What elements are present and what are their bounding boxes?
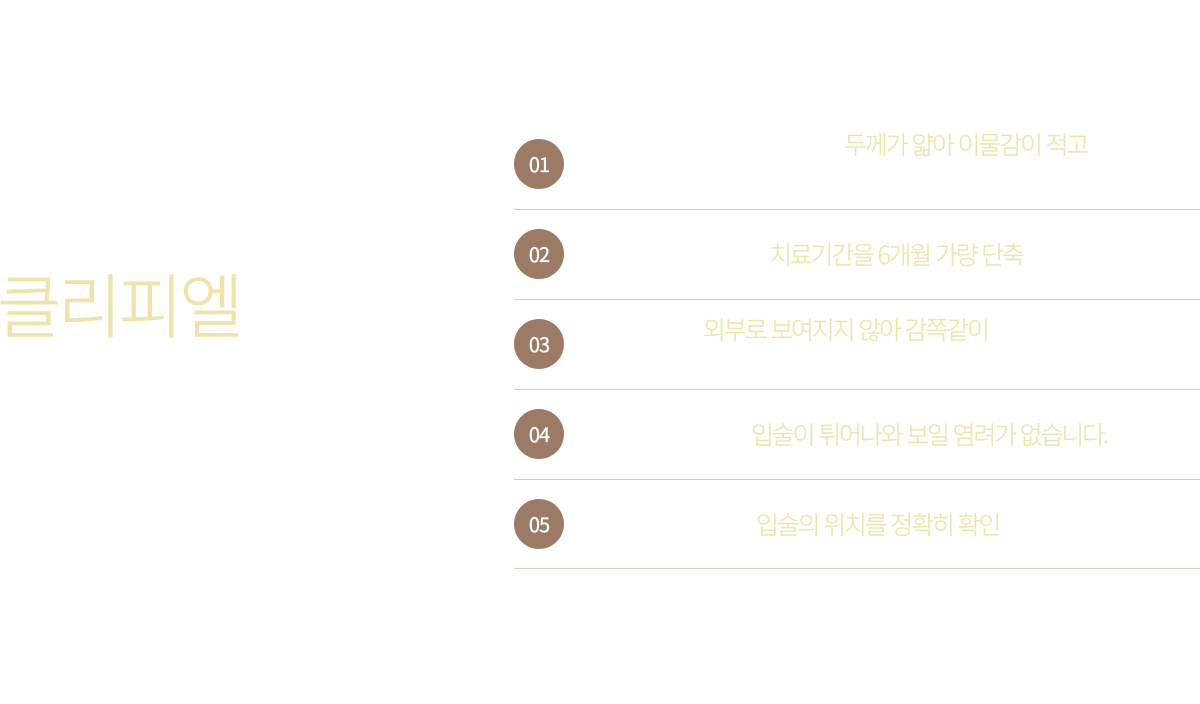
row 2 number badge	[514, 229, 564, 279]
row 4 number badge	[514, 409, 564, 459]
row 4 number badge: 04	[529, 419, 549, 448]
row 5 number badge: 05	[529, 509, 549, 538]
row 3 text: 외부로 보여지지 않아 감쪽같이	[703, 311, 988, 347]
row 5 number badge	[514, 499, 564, 549]
title: 클리피엘	[0, 252, 240, 353]
row 2 number badge: 02	[529, 239, 549, 268]
row 3 number badge: 03	[529, 329, 549, 358]
row 3 number badge	[514, 319, 564, 369]
row 5 text: 입술의 위치를 정확히 확인	[756, 506, 999, 542]
row 1 number badge	[514, 139, 564, 189]
row 1 number badge: 01	[529, 149, 549, 178]
row 2 text: 치료기간을 6개월 가량 단축	[769, 236, 1023, 272]
row 1 text: 두께가 얇아 이물감이 적고	[844, 126, 1087, 162]
row 4 text: 입술이 튀어나와 보일 염려가 없습니다.	[751, 416, 1107, 452]
